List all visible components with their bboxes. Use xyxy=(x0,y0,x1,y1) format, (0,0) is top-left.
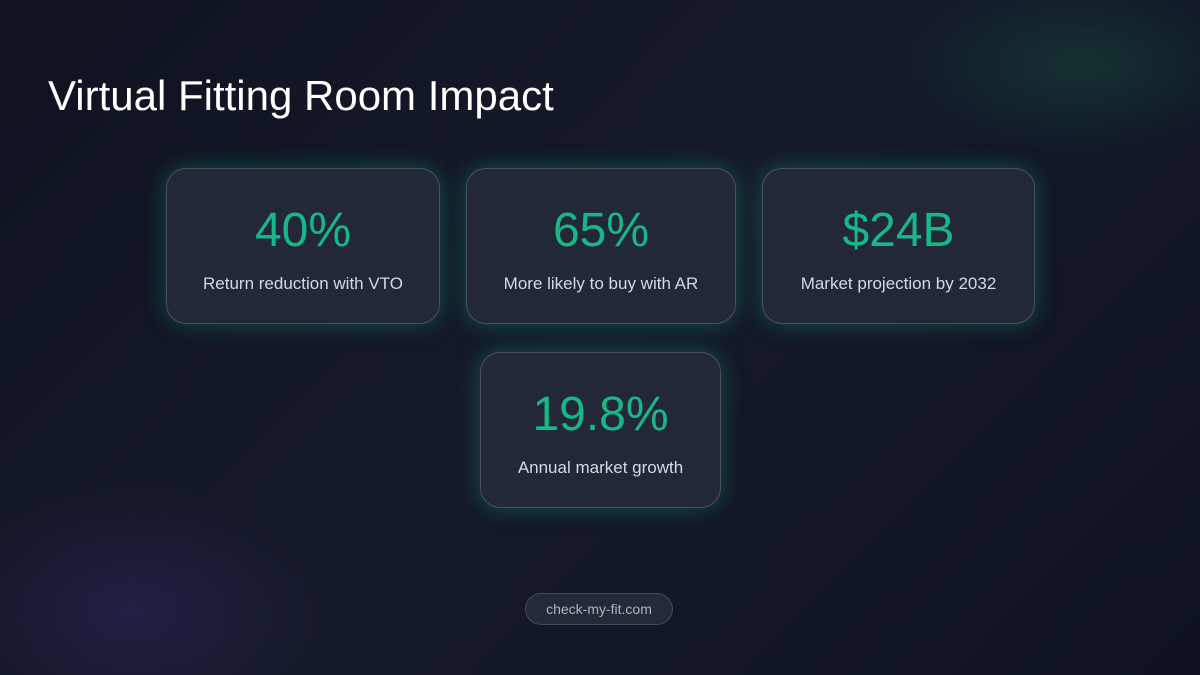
card: annual growth: 19.8% xyxy=(532,388,669,441)
card: market projection: $24B xyxy=(842,204,955,257)
footer badge: check-my-fit.com xyxy=(546,601,652,617)
card: annual growth: Annual market growth xyxy=(518,458,683,477)
card: market projection xyxy=(762,168,1035,324)
card: return reduction: 40% xyxy=(255,204,351,257)
card: return reduction xyxy=(166,168,440,324)
card: AR likelihood: 65% xyxy=(553,204,649,257)
card: market projection: Market projection by 2032 xyxy=(801,274,996,293)
card: AR likelihood xyxy=(466,168,736,324)
footer badge xyxy=(525,593,673,625)
card: annual growth xyxy=(480,352,721,508)
card: return reduction: Return reduction with VTO xyxy=(203,274,403,293)
title: Virtual Fitting Room Impact xyxy=(48,72,554,119)
card: AR likelihood: More likely to buy with AR xyxy=(504,274,698,293)
